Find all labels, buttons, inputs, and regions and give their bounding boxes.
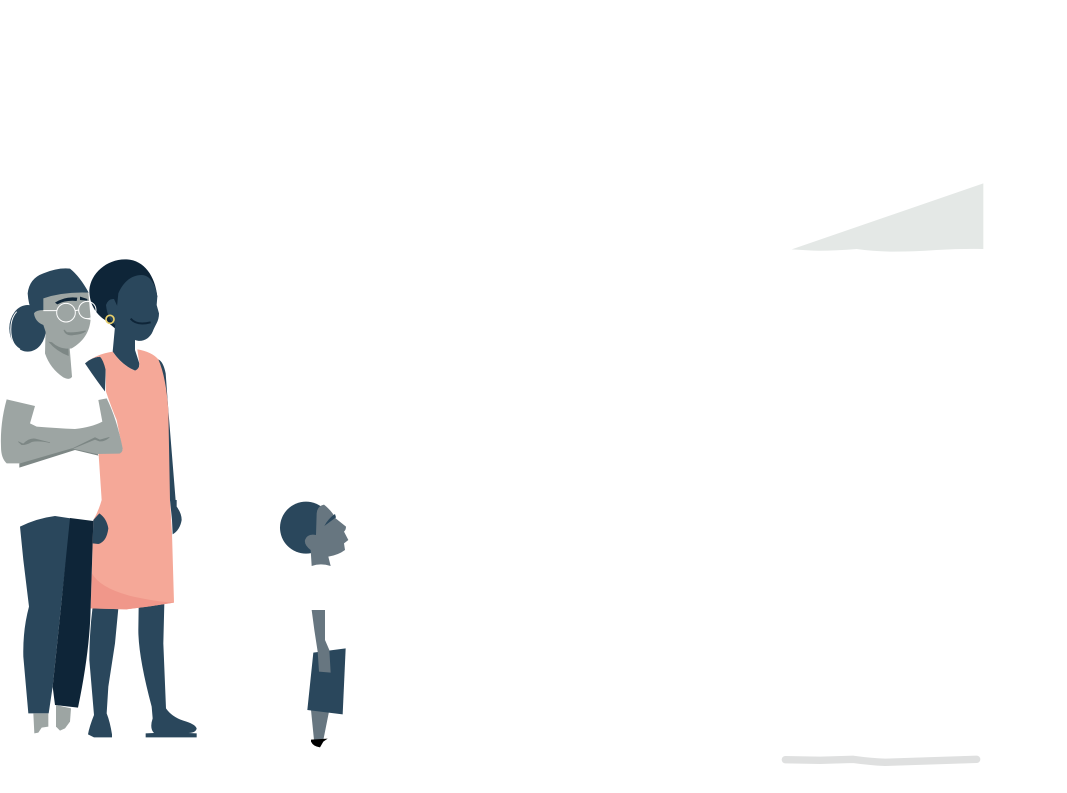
child: head — [280, 502, 348, 566]
child: arm and hand — [312, 610, 331, 673]
woman in pink dress — [85, 259, 197, 737]
woman with glasses: neck — [45, 327, 72, 379]
grey triangle shape — [792, 183, 983, 252]
woman with glasses: hair and bun — [9, 268, 89, 352]
woman with glasses: feet — [33, 705, 71, 733]
woman in dress: hands — [93, 500, 182, 544]
woman in dress: far arm — [158, 359, 176, 501]
woman in dress: pink dress — [85, 349, 174, 609]
woman in dress: legs and feet — [88, 603, 197, 737]
woman with glasses: face — [34, 293, 96, 349]
child: book held in hand — [307, 648, 346, 714]
woman with glasses: white shirt — [10, 358, 107, 427]
grey ground stroke — [785, 759, 977, 762]
woman with glasses: crossed arms — [1, 398, 123, 468]
woman with glasses: trousers — [20, 516, 93, 713]
woman with glasses — [1, 268, 123, 733]
child: leg and shoe — [311, 710, 329, 747]
woman in dress: head and neck — [89, 259, 159, 371]
woman in dress: near arm — [85, 357, 106, 392]
child looking up — [280, 502, 348, 747]
